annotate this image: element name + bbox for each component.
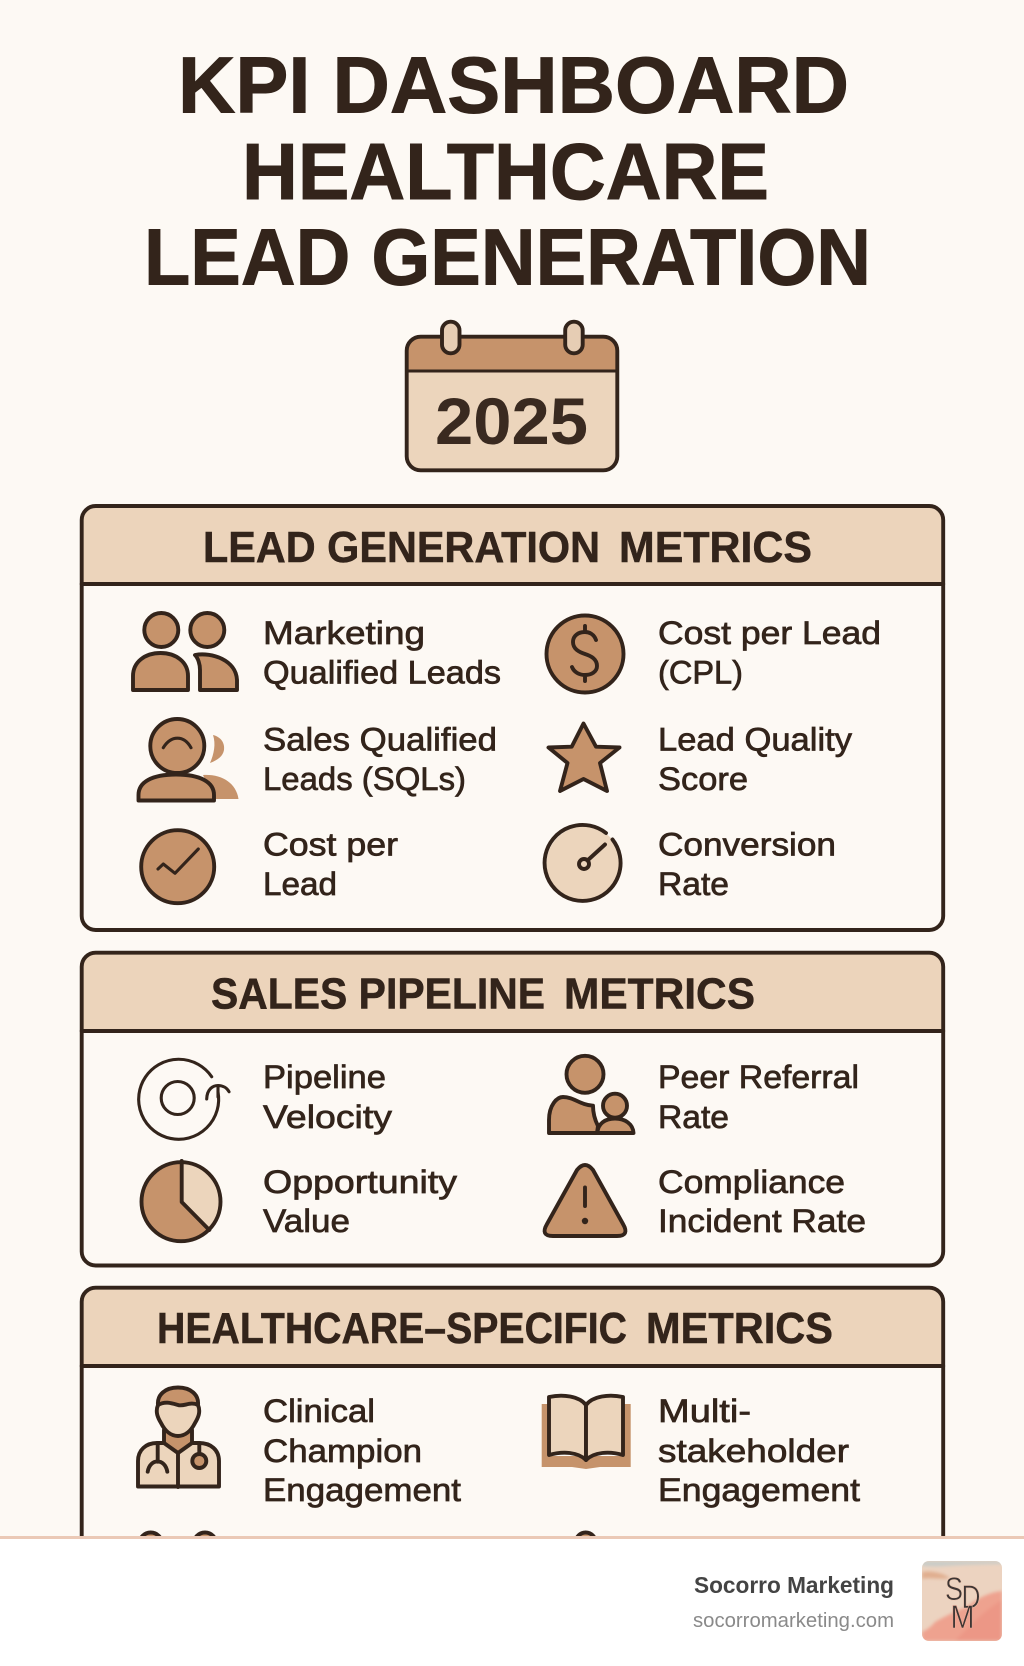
metric: compliance incident rate: [545, 1164, 866, 1239]
heading: lead generation metrics: [203, 524, 812, 572]
label: [263, 615, 501, 690]
label: Qualified Leads: [263, 654, 501, 690]
label: Marketing: [263, 615, 425, 651]
icon: 2025 calendar: [407, 322, 617, 470]
heading: sales pipeline metrics: METRICS: [564, 970, 755, 1018]
metric: sales qualified leads: [138, 719, 497, 800]
icon: doctor: [138, 1388, 219, 1487]
label: [658, 722, 853, 797]
title: KPI DASHBOARD: [178, 40, 849, 130]
label: Engagement: [658, 1472, 860, 1508]
metric: clinical champion engagement: [138, 1388, 461, 1508]
metric: pipeline velocity: [139, 1059, 393, 1139]
label: Pipeline: [263, 1059, 386, 1095]
heading: sales pipeline metrics: SALES PIPELINE: [211, 970, 545, 1018]
label: [658, 1059, 859, 1135]
logo: SDM watercolor: D: [962, 1579, 980, 1615]
icon: gauge: [545, 825, 622, 902]
label: Opportunity: [263, 1164, 458, 1200]
label: Score: [658, 761, 748, 797]
heading: healthcare-specific metrics: HEALTHCARE–SPECIFIC: [157, 1305, 627, 1353]
label: Lead Quality: [658, 722, 853, 758]
label: [263, 1164, 458, 1239]
label: Velocity: [263, 1099, 393, 1135]
label: [263, 827, 398, 902]
icon: 2025 calendar: 2025: [435, 384, 588, 458]
panel: lead generation metrics: [82, 506, 943, 930]
icon: dollar coin: [546, 616, 624, 692]
metric: cost per lead: [141, 827, 398, 903]
heading: healthcare-specific metrics: METRICS: [646, 1305, 833, 1353]
label: [263, 722, 497, 797]
heading: lead generation metrics: METRICS: [619, 524, 812, 572]
label: Engagement: [263, 1472, 461, 1508]
icon: check circle: [141, 830, 214, 903]
heading: sales pipeline metrics: [211, 970, 755, 1018]
title: HEALTHCARE: [242, 127, 769, 216]
icon: open book: [542, 1396, 631, 1469]
label: Incident Rate: [658, 1203, 866, 1239]
metric: peer referral rate: [549, 1056, 859, 1135]
heading: lead generation metrics: LEAD GENERATION: [203, 524, 600, 572]
title: [144, 40, 871, 302]
label: Cost per: [263, 827, 398, 863]
label: stakeholder: [658, 1433, 849, 1469]
brand url: socorromarketing.com: [693, 1610, 894, 1632]
logo: SDM watercolor: S: [945, 1571, 963, 1607]
icon: two people: [133, 613, 237, 690]
icon: pie chart: [142, 1161, 221, 1241]
metric: cost per lead (cpl): [546, 615, 881, 692]
brand name: Socorro Marketing: [694, 1572, 894, 1598]
metric: opportunity value: [142, 1161, 458, 1241]
metric: lead quality score: [548, 722, 853, 797]
label: [658, 615, 881, 690]
icon: star: [548, 724, 620, 791]
label: Champion: [263, 1433, 422, 1469]
metric: multi-stakeholder engagement: [542, 1393, 860, 1508]
panel: healthcare-specific metrics: [82, 1288, 943, 1560]
label: Sales Qualified: [263, 722, 497, 758]
label: Lead: [263, 866, 337, 902]
icon: person with referral: [549, 1056, 634, 1133]
title: LEAD GENERATION: [144, 212, 871, 302]
label: (CPL): [658, 654, 743, 690]
label: Conversion: [658, 827, 836, 863]
logo: SDM watercolor: M: [950, 1599, 974, 1635]
label: [263, 1059, 393, 1135]
icon: person with shadow: [138, 719, 238, 800]
label: Clinical: [263, 1393, 375, 1429]
label: Value: [263, 1203, 350, 1239]
label: Multi-: [658, 1393, 751, 1429]
label: [658, 827, 836, 902]
icon: warning triangle: [545, 1165, 625, 1236]
metric: conversion rate: [545, 825, 836, 902]
label: Leads (SQLs): [263, 761, 466, 797]
label: Compliance: [658, 1164, 845, 1200]
label: Rate: [658, 866, 729, 902]
label: Rate: [658, 1099, 729, 1135]
icons: cut-off row: [139, 1532, 596, 1556]
icon: circular arrow: [139, 1059, 229, 1139]
label: [658, 1393, 860, 1508]
label: [263, 1393, 461, 1508]
label: [658, 1164, 866, 1239]
footer: [0, 1536, 1024, 1666]
panel: sales pipeline metrics: [82, 953, 943, 1266]
label: Cost per Lead: [658, 615, 881, 651]
logo: SDM watercolor: [922, 1561, 1002, 1641]
label: Peer Referral: [658, 1059, 859, 1095]
metric: marketing qualified leads: [133, 613, 501, 690]
